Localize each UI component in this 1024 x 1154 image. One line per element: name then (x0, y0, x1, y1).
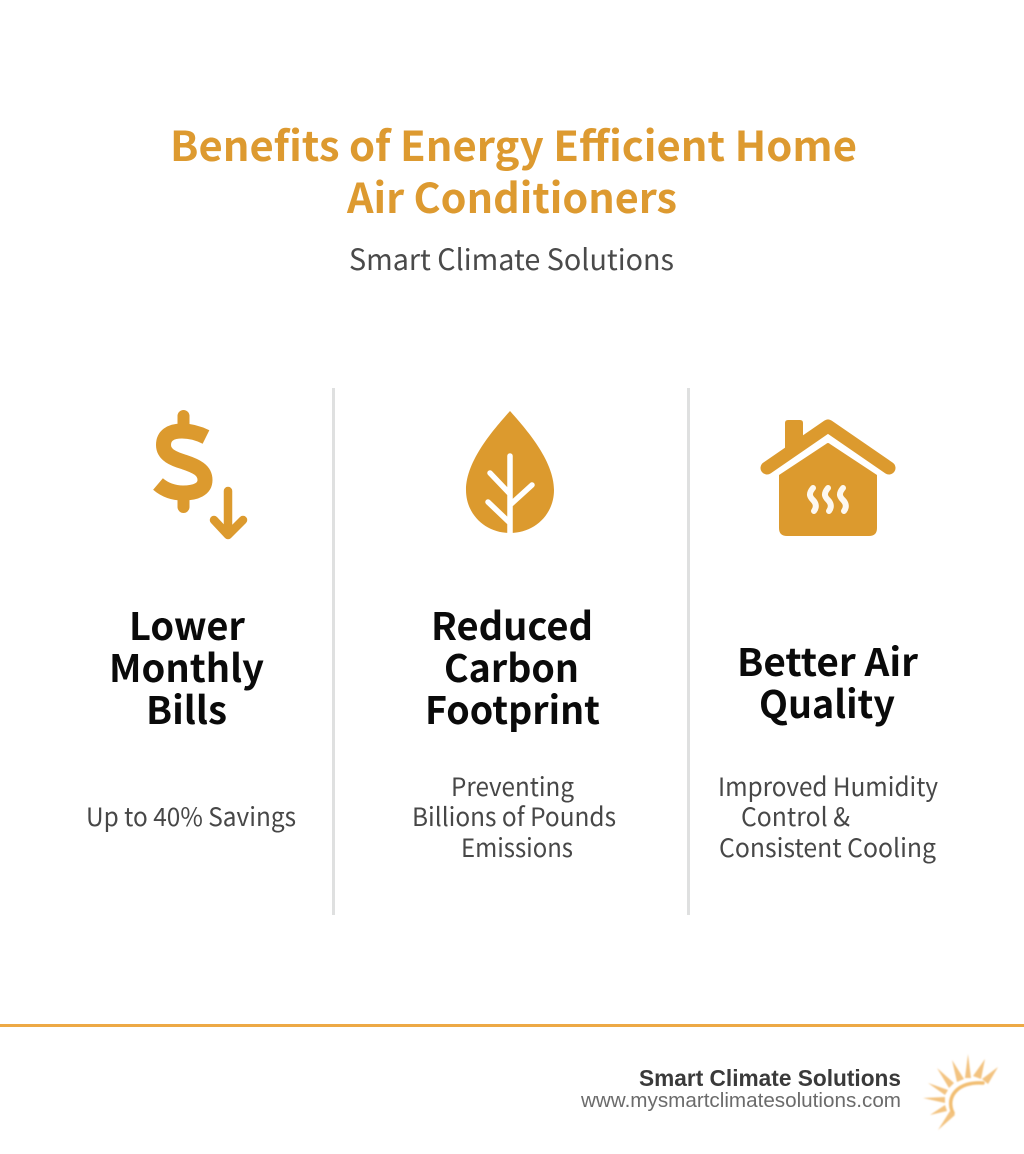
heading: better air quality: Better Air (737, 632, 918, 687)
text: emissions (412, 767, 616, 865)
heading: lower monthly bills (109, 596, 264, 735)
heading: reduced carbon footprint: Reduced (431, 596, 593, 651)
heading: reduced carbon footprint (425, 596, 600, 735)
icon: dollar sign with down arrow (158, 416, 243, 535)
text: savings: Up to 40% Savings (86, 797, 296, 834)
heading: lower monthly bills: Monthly (109, 638, 264, 693)
text: humidity and cooling: Control & (741, 797, 850, 834)
text: emissions: Billions of Pounds (412, 797, 616, 834)
title: Benefits of Energy Efficient Home (170, 113, 857, 173)
heading: reduced carbon footprint: Footprint (425, 680, 600, 735)
text: humidity and cooling: Improved Humidity (718, 767, 938, 804)
title (170, 113, 857, 225)
heading: better air quality (737, 632, 918, 729)
icon: sun logo (923, 1054, 998, 1130)
heading: better air quality: Quality (759, 674, 895, 729)
panel: reduced carbon footprint (412, 411, 616, 865)
heading: lower monthly bills: Lower (129, 596, 245, 651)
icon: leaf (466, 411, 554, 533)
heading: reduced carbon footprint: Carbon (444, 638, 579, 693)
icon: house with heat waves (767, 420, 889, 536)
footer brand text (580, 1065, 901, 1112)
title: Air Conditioners (346, 165, 677, 225)
footer rule (0, 1024, 1024, 1027)
text: humidity and cooling: Consistent Cooling (719, 828, 937, 865)
text: emissions: Preventing (451, 767, 575, 804)
footer brand text: www.mysmartclimatesolutions.com (580, 1090, 901, 1112)
text: emissions: Emissions (461, 828, 573, 865)
panel: better air quality (718, 420, 938, 865)
subtitle: Smart Climate Solutions (349, 237, 674, 279)
heading: lower monthly bills: Bills (146, 680, 227, 735)
footer brand text: Smart Climate Solutions (639, 1065, 901, 1091)
panel: lower monthly bills (86, 416, 296, 834)
text: humidity and cooling (718, 767, 938, 865)
